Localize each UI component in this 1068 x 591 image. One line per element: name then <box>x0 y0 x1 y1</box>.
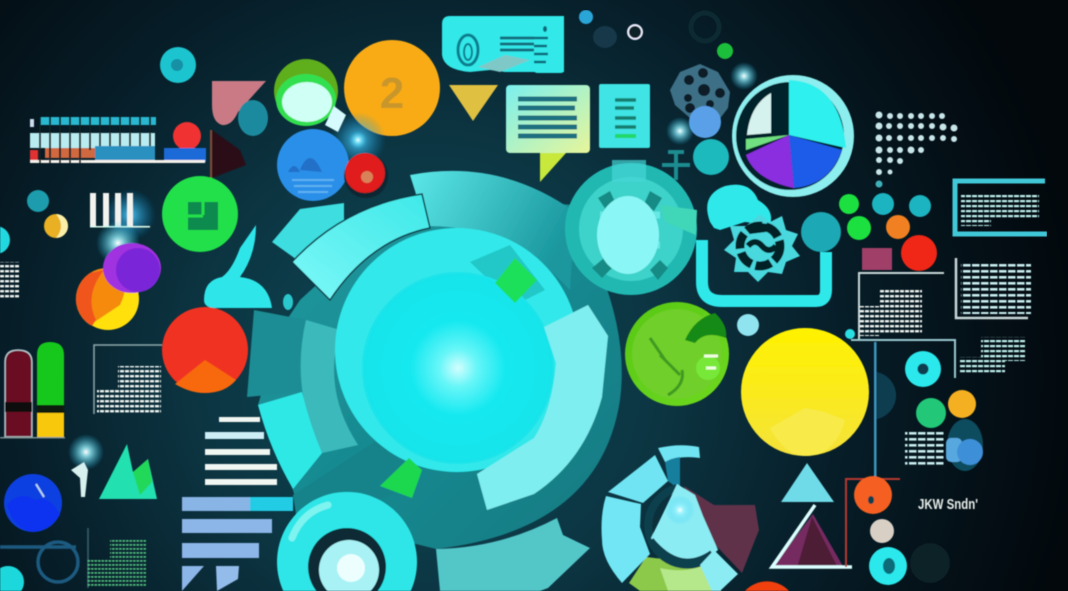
table panel upper <box>859 273 944 340</box>
bottom ring dial <box>277 492 417 591</box>
upper left wedge <box>272 203 344 262</box>
icon: cyan plant blob <box>204 225 293 310</box>
lamp glow icon <box>68 434 104 497</box>
circle: orange badge: 2 <box>380 69 404 118</box>
circle: red button <box>344 153 388 198</box>
mountain chart <box>99 444 157 499</box>
circle: pearl <box>870 519 894 543</box>
lower dark segment <box>293 435 410 514</box>
circle: faint dark <box>910 543 950 583</box>
connector tree with table <box>845 329 1026 477</box>
circle: green chart badge <box>162 176 238 252</box>
circle: blue coin <box>277 129 349 201</box>
top arc tab <box>658 445 700 462</box>
left cyan block <box>258 392 322 489</box>
triangle: outlined purple <box>772 505 852 568</box>
green tile bottom <box>380 458 422 498</box>
upper left arc segment <box>292 194 430 300</box>
donut chart <box>602 445 759 591</box>
circle: teal ellipse <box>238 100 268 136</box>
ring segment lower <box>602 496 650 583</box>
ring segment upper <box>608 455 668 503</box>
icon: cross sprout <box>662 152 690 180</box>
small icon dots <box>579 10 758 90</box>
card: green list <box>599 84 650 148</box>
callout: text card <box>506 85 590 182</box>
bar chart: white bars glow <box>90 189 156 265</box>
circles: left dots <box>0 190 68 253</box>
icon: dark gear cluster <box>666 64 730 145</box>
bars: tall capsules <box>0 342 65 438</box>
dot matrix <box>876 112 958 188</box>
left dark block <box>247 310 306 397</box>
shape: pink wedge <box>212 81 266 125</box>
maroon slice <box>684 486 759 573</box>
circle: teal by pie <box>693 139 729 175</box>
text: small label: JKW Sndn' <box>918 496 978 513</box>
ring: cyan <box>905 351 941 387</box>
circle: red dot <box>173 122 201 150</box>
triangle: yellow <box>449 85 498 121</box>
mini bars and glowing bottle <box>905 419 983 471</box>
circle: dark teal half <box>877 372 896 419</box>
table chart left <box>94 345 162 414</box>
mini table left edge <box>0 262 20 300</box>
disc shade patch <box>470 245 545 305</box>
shape: maroon shadow <box>210 130 246 180</box>
pie chart <box>732 75 854 197</box>
circle: cyan edge <box>0 566 24 591</box>
connector: red bracket <box>846 479 900 567</box>
icon: cloud and gear frame <box>702 185 826 301</box>
left ring <box>301 320 358 453</box>
circle: purple <box>103 243 161 293</box>
green grid chart <box>87 528 146 588</box>
circle: yellow pie <box>741 328 869 456</box>
circle: blue mountain <box>4 474 62 532</box>
stacked blue bars <box>182 497 293 591</box>
circle: green leaf <box>625 302 729 406</box>
dark arc under teardrop <box>651 540 712 561</box>
gem circle <box>565 160 697 295</box>
circle: orange dot <box>854 476 892 514</box>
glow: between circles <box>325 106 386 168</box>
circle: pale dot <box>737 314 759 336</box>
lower segment <box>436 518 590 591</box>
triangle: cyan <box>781 463 834 502</box>
circle: teal dot top <box>160 47 196 83</box>
teardrop <box>651 484 718 561</box>
right light segment <box>477 305 608 510</box>
ring: cyan lower <box>869 547 907 585</box>
circle: orange bottom <box>745 581 789 591</box>
inner disc <box>335 228 579 472</box>
chart: colored bar grid <box>30 117 206 163</box>
circle: green ring <box>274 59 338 126</box>
card: narrow list at top <box>534 16 564 73</box>
pie: orange yellow <box>76 268 139 330</box>
strip <box>700 550 738 591</box>
monitor panel <box>955 181 1047 234</box>
table panel right <box>956 258 1031 318</box>
dark ring <box>648 488 714 565</box>
circle: orange badge <box>344 40 440 136</box>
central gear <box>247 171 622 591</box>
green slice <box>629 552 721 591</box>
outer ring base <box>258 190 622 549</box>
dots: green and amber <box>916 390 976 428</box>
callout: top speech card <box>442 16 564 72</box>
stacked white bars <box>205 417 277 485</box>
cluster of dots <box>801 193 937 271</box>
green tile top <box>495 258 537 303</box>
gauge ring <box>0 542 78 582</box>
top segment <box>410 171 575 290</box>
circle: red pie <box>162 307 248 393</box>
